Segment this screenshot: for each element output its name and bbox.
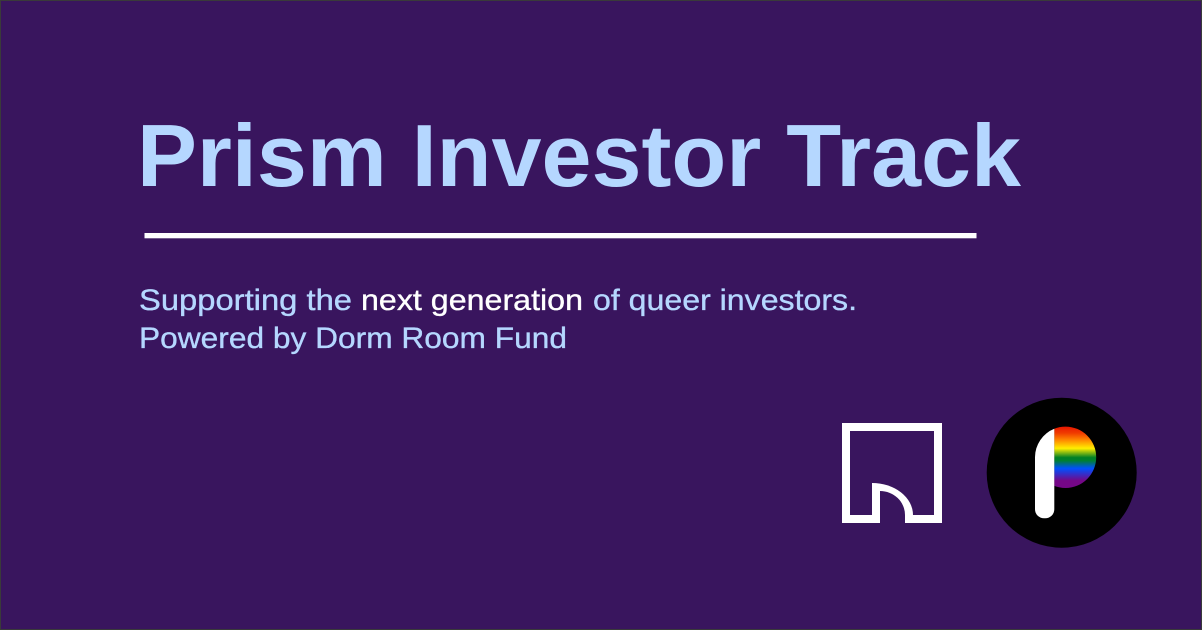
title underline rule <box>144 233 976 238</box>
icon: Dorm Room Fund logo <box>842 423 942 523</box>
subtitle line 1: Supporting the <box>139 284 352 317</box>
logo black circle <box>987 398 1137 548</box>
subtitle line 1: next generation <box>361 284 583 317</box>
logo rainbow bowl <box>1054 426 1096 488</box>
subtitle line 1 <box>139 284 857 317</box>
icon: Prism logo <box>987 398 1137 548</box>
subtitle line 2: Powered by Dorm Room Fund <box>139 322 567 355</box>
logo white stem <box>1035 429 1054 518</box>
title: Prism Investor Track <box>137 106 1022 205</box>
subtitle line 1: of queer investors. <box>593 284 857 317</box>
